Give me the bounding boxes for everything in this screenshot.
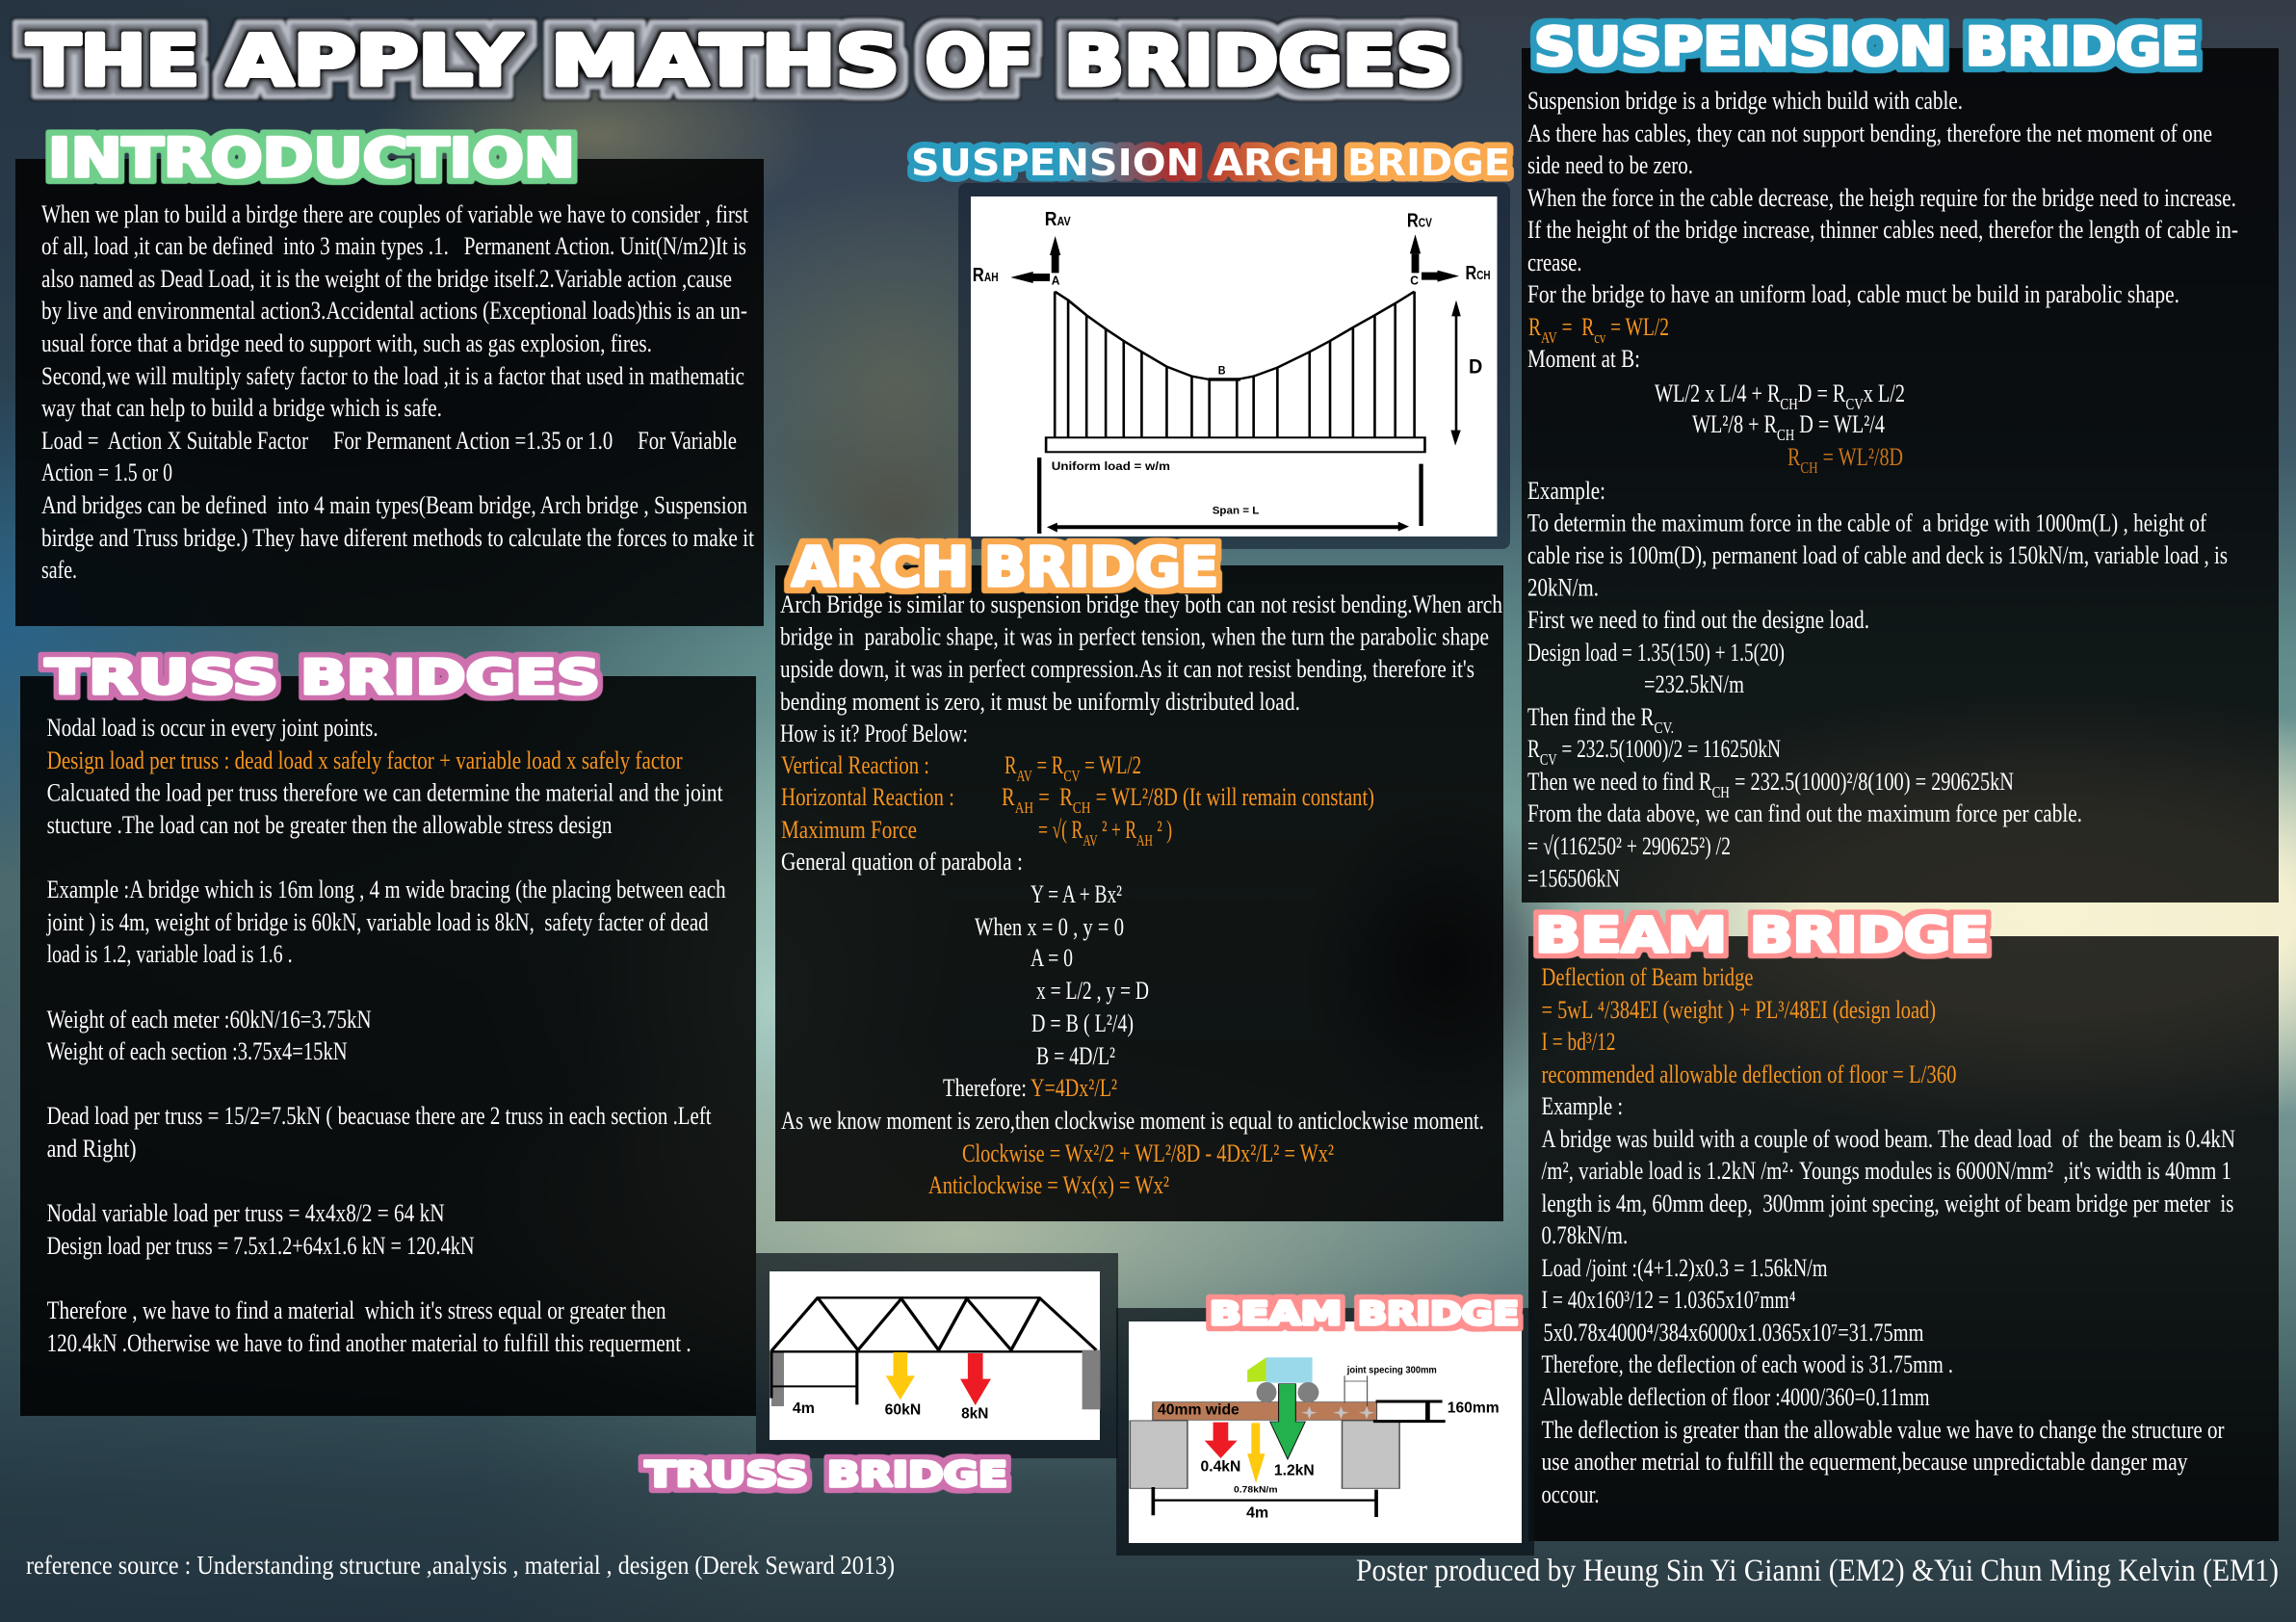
arch bridge body text: Y=4Dx²/L² bbox=[1031, 1074, 1117, 1102]
suspension bridge body text: = 232.5(1000)²/8(100) = 290625kN bbox=[1730, 768, 2014, 796]
arch bridge body text: x = L/2 , y = D bbox=[1036, 977, 1149, 1005]
footer: reference source: reference source : Understanding structure ,analysis , material , desigen (Derek Seward 2013) bbox=[26, 1551, 895, 1580]
arch bridge body text: = WL/2 bbox=[1080, 751, 1141, 779]
beam bridge body text: Therefore, the deflection of each wood is 31.75mm . bbox=[1541, 1350, 1953, 1378]
introduction body text: And bridges can be defined into 4 main types(Beam bridge, Arch bridge , Suspension bbox=[41, 491, 747, 519]
panel: truss bridges bbox=[20, 650, 756, 1416]
beam bridge body text: 0.78kN/m. bbox=[1541, 1221, 1628, 1249]
beam bridge body text: Allowable deflection of floor :4000/360=0.11mm bbox=[1541, 1383, 1930, 1411]
beam labels: 0.78kN/m bbox=[1234, 1484, 1278, 1495]
introduction body text: of all, load ,it can be defined into 3 main types .1. Permanent Action. Unit(N/m2)It is bbox=[41, 232, 746, 260]
arch bridge body text: B = 4D/L² bbox=[1036, 1042, 1115, 1070]
heading: suspension bridge: BRIDGE bbox=[1966, 16, 2199, 77]
truss bridges body text: Weight of each section :3.75x4=15kN bbox=[47, 1037, 348, 1065]
arch bridge body text: A = 0 bbox=[1031, 944, 1073, 972]
beam bridge body text: Deflection of Beam bridge bbox=[1541, 963, 1753, 991]
truss bridges body text bbox=[46, 714, 726, 1357]
introduction body text: safe. bbox=[41, 556, 77, 584]
panel: suspension bridge bbox=[1522, 16, 2279, 903]
beam labels: 160mm bbox=[1448, 1400, 1500, 1416]
beam labels: 0.4kN bbox=[1201, 1458, 1240, 1475]
suspension bridge body text: cv bbox=[1594, 328, 1606, 347]
suspension bridge body text: =156506kN bbox=[1527, 865, 1620, 893]
truss bridges body text: Design load per truss = 7.5x1.2+64x1.6 kN = 120.4kN bbox=[47, 1232, 475, 1260]
introduction body text: Action = 1.5 or 0 bbox=[41, 458, 172, 486]
heading: truss bridge: BRIDGE bbox=[827, 1455, 1007, 1495]
suspension bridge body text: = WL/2 bbox=[1605, 313, 1669, 341]
introduction body text: way that can help to build a bridge which is safe. bbox=[41, 394, 442, 422]
arch bridge body text: Horizontal Reaction : bbox=[781, 783, 954, 811]
suspension bridge body text: Example: bbox=[1527, 477, 1605, 505]
diagram labels: D bbox=[1469, 355, 1482, 378]
arch bridge body text: R bbox=[1004, 751, 1021, 779]
diagram labels: C bbox=[1410, 275, 1419, 288]
truss bridges body text: Nodal load is occur in every joint points. bbox=[47, 714, 378, 742]
heading: arch bridge: BRIDGE bbox=[984, 536, 1218, 599]
diagram labels: B bbox=[1218, 363, 1226, 377]
arch bridge body text: Therefore: bbox=[943, 1074, 1027, 1102]
arch bridge body text: D = B ( L²/4) bbox=[1031, 1009, 1134, 1037]
load arrow: 8kN bbox=[960, 1353, 991, 1405]
arch bridge body text: = √( R bbox=[1038, 816, 1104, 844]
heading: arch bridge: ARCH bbox=[792, 536, 969, 599]
suspension bridge body text: = WL²/8D bbox=[1818, 443, 1903, 471]
beam bridge body text: Load /joint :(4+1.2)x0.3 = 1.56kN/m bbox=[1541, 1254, 1828, 1282]
truss bridges body text: Dead load per truss = 15/2=7.5kN ( beacuase there are 2 truss in each section .Left bbox=[47, 1102, 712, 1130]
arch bridge body text: bridge in parabolic shape, it was in perfect tension, when the turn the parabolic shape bbox=[780, 623, 1489, 651]
arch bridge body text: Maximum Force bbox=[781, 816, 917, 844]
suspension bridge body text: Moment at B: bbox=[1527, 345, 1640, 373]
arch bridge body text: As we know moment is zero,then clockwise moment is equal to anticlockwise moment. bbox=[781, 1107, 1484, 1135]
arch bridge body text: bending moment is zero, it must be uniformly distributed load. bbox=[780, 688, 1300, 716]
suspension bridge body text: Then find the R bbox=[1527, 703, 1685, 731]
beam bridge body text: 5x0.78x4000⁴/384x6000x1.0365x10⁷=31.75mm bbox=[1543, 1319, 1924, 1347]
heading: truss bridge: TRUSS bbox=[645, 1455, 808, 1495]
load arrow: 0.78kN/m bbox=[1247, 1423, 1265, 1483]
introduction body text: When we plan to build a birdge there are couples of variable we have to consider , first bbox=[41, 200, 749, 228]
arch bridge body text: AH bbox=[1015, 798, 1033, 817]
suspension bridge body text: CV. bbox=[1654, 719, 1674, 737]
suspension bridge body text: D = R bbox=[1798, 379, 1846, 407]
title: MATHS bbox=[551, 20, 900, 101]
heading: beam bridge (diagram): BRIDGE bbox=[1358, 1295, 1519, 1332]
heading: beam bridge: BEAM bbox=[1535, 907, 1727, 963]
panel: beam bridge bbox=[1528, 907, 2279, 1541]
icon: truck bbox=[1247, 1357, 1318, 1402]
diagram labels: RAH bbox=[973, 264, 999, 286]
suspension bridge body text: R bbox=[1787, 443, 1804, 471]
suspension bridge body text: Suspension bridge is a bridge which build with cable. bbox=[1527, 87, 1963, 115]
beam labels: 40mm wide bbox=[1158, 1401, 1239, 1418]
title: OF bbox=[926, 20, 1033, 101]
suspension bridge body text bbox=[1527, 87, 2238, 893]
suspension bridge body text: First we need to find out the designe load. bbox=[1527, 606, 1869, 634]
suspension bridge body text: = R bbox=[1557, 313, 1595, 341]
suspension bridge body text: CH bbox=[1711, 783, 1730, 801]
introduction body text bbox=[41, 200, 755, 584]
arch bridge body text: = R bbox=[1033, 783, 1073, 811]
arch bridge body text: AV bbox=[1017, 767, 1032, 785]
arch bridge body text: Vertical Reaction : bbox=[781, 751, 929, 779]
suspension bridge body text: crease. bbox=[1527, 249, 1581, 276]
truss labels: 4m bbox=[793, 1400, 815, 1417]
introduction body text: Load = Action X Suitable Factor For Permanent Action =1.35 or 1.0 For Variable bbox=[41, 427, 737, 455]
truss diagram frame bbox=[756, 1253, 1118, 1458]
beam labels: 4m bbox=[1246, 1504, 1268, 1521]
load arrow: 60kN bbox=[886, 1352, 915, 1400]
beam bridge body text: Example : bbox=[1541, 1092, 1623, 1120]
diagram labels: RAV bbox=[1045, 208, 1071, 230]
truss labels: 8kN bbox=[961, 1406, 988, 1422]
truss bridges body text: Calcuated the load per truss therefore we can determine the material and the joint bbox=[47, 778, 723, 807]
truss bridges body text: 120.4kN .Otherwise we have to find another material to fulfill this requerment . bbox=[47, 1329, 691, 1357]
beam labels: joint specing 300mm bbox=[1346, 1364, 1437, 1375]
suspension bridge body text: WL²/8 + R bbox=[1692, 410, 1801, 438]
suspension bridge body text: WL/2 x L/4 + R bbox=[1655, 379, 1816, 407]
truss diagram bbox=[771, 1297, 1100, 1422]
introduction body text: by live and environmental action3.Accidental actions (Exceptional loads)this is an un- bbox=[41, 297, 747, 325]
suspension bridge body text: Then we need to find R bbox=[1527, 768, 1763, 796]
heading: truss bridges: BRIDGES bbox=[300, 650, 600, 705]
arch bridge body text: ² ) bbox=[1153, 816, 1172, 844]
truss bridges body text: stucture .The load can not be greater then the allowable stress design bbox=[47, 811, 613, 839]
introduction body text: also named as Dead Load, it is the weight of the bridge itself.2.Variable action ,cause bbox=[41, 265, 732, 293]
diagram labels: Uniform load = w/m bbox=[1052, 459, 1170, 473]
truss bridges body text: joint ) is 4m, weight of bridge is 60kN, variable load is 8kN, safety facter of dead bbox=[46, 908, 709, 936]
heading: truss bridges: TRUSS bbox=[45, 650, 278, 705]
truss bridges body text: Design load per truss : dead load x safely factor + variable load x safely factor bbox=[47, 746, 683, 774]
diagram labels: RCV bbox=[1407, 209, 1432, 231]
arch bridge body text: When x = 0 , y = 0 bbox=[975, 913, 1124, 941]
heading: suspension arch bridge: SUSPENSION bbox=[911, 142, 1199, 184]
load arrow: 0.4kN bbox=[1205, 1423, 1238, 1458]
load arrow: 1.2kN bbox=[1270, 1384, 1305, 1459]
beam diagram bbox=[1130, 1357, 1500, 1521]
suspension bridge body text: AV bbox=[1541, 328, 1557, 347]
suspension bridge body text: CH bbox=[1780, 395, 1798, 413]
beam labels bbox=[1158, 1364, 1500, 1521]
beam diagram frame bbox=[1116, 1308, 1534, 1556]
truss bridges body text: Example :A bridge which is 16m long , 4 m wide bracing (the placing between each bbox=[47, 876, 726, 903]
truss labels: 60kN bbox=[885, 1402, 921, 1418]
truss bridges body text: Nodal variable load per truss = 4x4x8/2 = 64 kN bbox=[47, 1199, 445, 1227]
suspension bridge body text: R bbox=[1527, 735, 1544, 763]
arch bridge body text: AV bbox=[1083, 831, 1098, 850]
truss bridges body text: Weight of each meter :60kN/16=3.75kN bbox=[47, 1006, 372, 1033]
diagram labels: Span = L bbox=[1213, 504, 1259, 516]
arch bridge body text: upside down, it was in perfect compression.As it can not resist bending, therefore it's bbox=[780, 655, 1474, 683]
heading: beam bridge: BRIDGE bbox=[1750, 907, 1989, 963]
panel: introduction bbox=[15, 127, 764, 626]
truss bridges body text: load is 1.2, variable load is 1.6 . bbox=[47, 940, 293, 968]
arch bridge body text: Arch Bridge is similar to suspension bridge they both can not resist bending.When arch bbox=[780, 590, 1502, 618]
beam bridge body text: I = 40x160³/12 = 1.0365x10⁷mm⁴ bbox=[1541, 1286, 1795, 1314]
arch bridge body text: Anticlockwise = Wx(x) = Wx² bbox=[928, 1171, 1169, 1199]
introduction body text: Second,we will multiply safety factor to the load ,it is a factor that used in mathematic bbox=[41, 362, 744, 390]
suspension bridge body text: side need to be zero. bbox=[1527, 151, 1693, 179]
suspension bridge body text: =232.5kN/m bbox=[1644, 670, 1744, 698]
arch bridge body text: CH bbox=[1073, 798, 1090, 817]
arch bridge body text bbox=[780, 590, 1502, 1199]
beam labels: 1.2kN bbox=[1274, 1463, 1315, 1478]
arch bridge body text: Y = A + Bx² bbox=[1031, 880, 1122, 908]
introduction body text: usual force that a bridge need to support with, such as gas explosion, fires. bbox=[41, 329, 652, 357]
suspension bridge body text: CH bbox=[1800, 458, 1818, 477]
suspension bridge body text: = √(116250² + 290625²) /2 bbox=[1527, 832, 1731, 860]
suspension bridge body text: CV bbox=[1540, 750, 1557, 769]
arch bridge body text: General quation of parabola : bbox=[781, 848, 1023, 876]
arch bridge body text: CV bbox=[1063, 767, 1081, 785]
arch bridge body text: Clockwise = Wx²/2 + WL²/8D - 4Dx²/L² = Wx² bbox=[962, 1139, 1334, 1167]
truss labels bbox=[793, 1400, 988, 1422]
diagram labels bbox=[973, 208, 1491, 516]
suspension arch diagram bbox=[973, 208, 1491, 534]
beam bridge body text bbox=[1541, 963, 2235, 1508]
suspension bridge body text: 20kN/m. bbox=[1527, 574, 1599, 602]
arch bridge body text: R bbox=[1002, 783, 1018, 811]
arch bridge body text: How is it? Proof Below: bbox=[780, 719, 968, 747]
arch bridge body text: AH bbox=[1136, 831, 1153, 850]
diagram labels: RCH bbox=[1466, 262, 1491, 284]
arch bridge body text: = R bbox=[1032, 751, 1064, 779]
suspension bridge body text: CH bbox=[1777, 426, 1794, 444]
heading: suspension bridge: SUSPENSION bbox=[1534, 16, 1946, 77]
heading: suspension arch bridge: ARCH bbox=[1213, 142, 1334, 184]
diagram labels: A bbox=[1052, 275, 1060, 288]
truss bridges body text: and Right) bbox=[47, 1135, 137, 1163]
suspension bridge body text: For the bridge to have an uniform load, cable muct be build in parabolic shape. bbox=[1527, 280, 2179, 308]
beam bridge body text: recommended allowable deflection of floor = L/360 bbox=[1541, 1060, 1957, 1088]
heading: beam bridge (diagram): BEAM bbox=[1210, 1295, 1342, 1332]
beam bridge body text: = 5wL ⁴/384EI (weight ) + PL³/48EI (design load) bbox=[1541, 996, 1936, 1024]
suspension bridge body text: x L/2 bbox=[1864, 379, 1905, 407]
title: THE bbox=[27, 20, 199, 101]
suspension bridge body text: D = WL²/4 bbox=[1794, 410, 1885, 438]
title: BRIDGES bbox=[1064, 20, 1452, 101]
arch bridge body text: ² + R bbox=[1098, 816, 1137, 844]
suspension bridge body text: = 232.5(1000)/2 = 116250kN bbox=[1557, 735, 1781, 763]
suspension diagram frame bbox=[958, 183, 1510, 549]
beam bridge body text: occour. bbox=[1541, 1480, 1599, 1508]
introduction body text: birdge and Truss bridge.) They have diferent methods to calculate the forces to make it bbox=[41, 524, 755, 552]
arch bridge body text: = WL²/8D (It will remain constant) bbox=[1090, 783, 1374, 811]
title: APPLY bbox=[227, 20, 522, 101]
panel: arch bridge bbox=[775, 536, 1503, 1221]
suspension bridge body text: R bbox=[1528, 313, 1545, 341]
suspension bridge body text: CV bbox=[1845, 395, 1864, 413]
heading: introduction: INTRODUCTION bbox=[48, 127, 575, 189]
beam bridge body text: I = bd³/12 bbox=[1541, 1028, 1616, 1056]
heading: suspension arch bridge: BRIDGE bbox=[1347, 142, 1510, 184]
suspension bridge body text: From the data above, we can find out the maximum force per cable. bbox=[1527, 799, 2082, 827]
truss bridges body text: Therefore , we have to find a material which it's stress equal or greater then bbox=[47, 1296, 666, 1324]
suspension bridge body text: Design load = 1.35(150) + 1.5(20) bbox=[1527, 639, 1785, 667]
